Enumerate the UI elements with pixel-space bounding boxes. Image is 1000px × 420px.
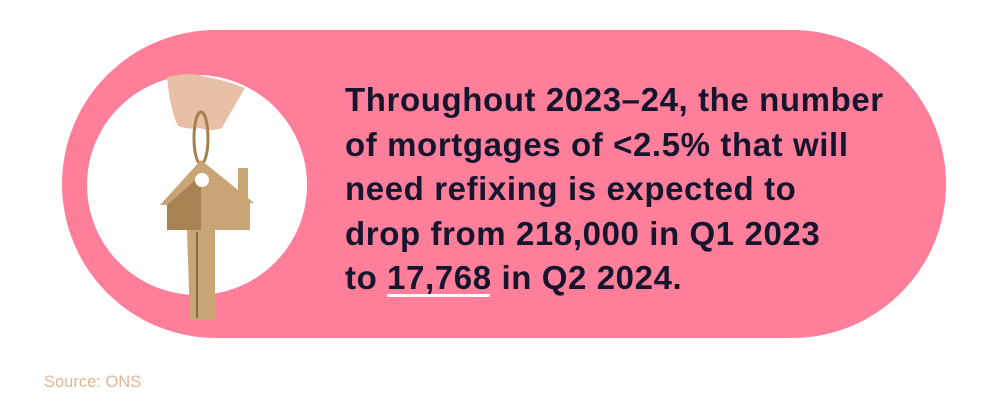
text block: main statement: to in Q2 2024.: [345, 259, 682, 296]
text block: main statement: 17,768: [387, 259, 492, 296]
icon circle background: [87, 75, 307, 295]
text block: main statement: drop from 218,000 in Q1 2023: [345, 214, 820, 252]
text block: main statement: of mortgages of <2.5% that will: [345, 126, 849, 162]
text block: main statement: Throughout 2023–24, the number: [345, 81, 884, 118]
text block: main statement: need refixing is expected to: [345, 170, 796, 207]
panel: pink pill: [62, 30, 946, 338]
text block: main statement: [345, 81, 884, 297]
icon: hand holding house key: [160, 74, 254, 320]
source note: Source: ONS: [44, 373, 141, 391]
